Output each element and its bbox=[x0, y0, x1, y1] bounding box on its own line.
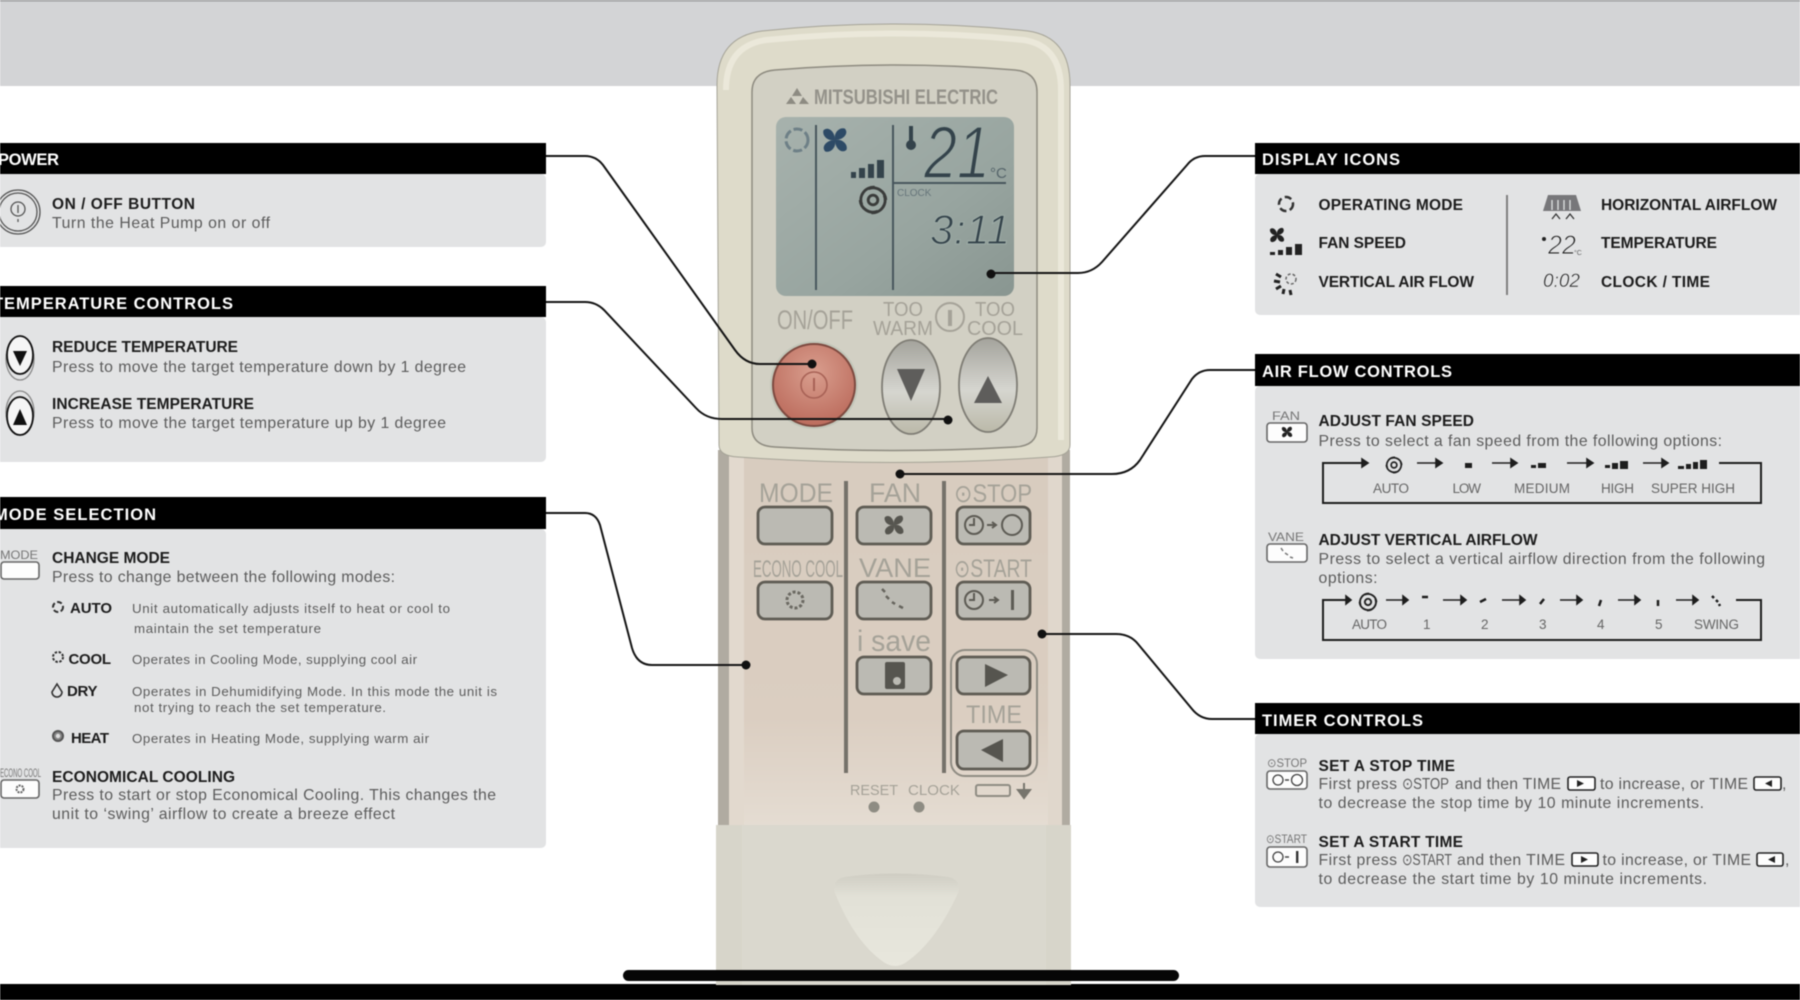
vertical airflow text bbox=[1318, 532, 1765, 587]
STOP key: ⊙STOP bbox=[954, 480, 1032, 508]
icon: mode key: MODE bbox=[0, 548, 38, 562]
stop time description: , bbox=[1782, 776, 1786, 793]
icon: vane key bbox=[1267, 530, 1307, 562]
panel: timer controls bbox=[1255, 703, 1800, 907]
auto mode: maintain the set temperature bbox=[134, 621, 321, 636]
icon: econo cool key bbox=[0, 766, 41, 798]
fan speed cycle diagram bbox=[1323, 457, 1761, 503]
connector: display icons bbox=[986, 156, 1255, 278]
vane labels: 3 bbox=[1539, 617, 1547, 632]
temperature row: 22 bbox=[1547, 230, 1576, 260]
auto mode bbox=[53, 600, 450, 636]
fan speed labels bbox=[1373, 481, 1735, 496]
TIME key group: TIME bbox=[966, 701, 1022, 729]
cover thumb notch bbox=[834, 874, 959, 966]
STOP key bbox=[954, 480, 1032, 544]
LCD temperature: 21 bbox=[923, 111, 990, 194]
vertical airflow text: Press to select a vertical airflow direction from the following bbox=[1318, 551, 1765, 568]
temperature header bbox=[0, 286, 546, 317]
operating mode row: OPERATING MODE bbox=[1318, 197, 1463, 214]
connector: air flow bbox=[896, 370, 1255, 478]
timer header bbox=[1255, 703, 1800, 734]
START key bbox=[954, 555, 1032, 619]
too warm label: WARM bbox=[873, 318, 933, 340]
start time description bbox=[1318, 852, 1789, 888]
stop time description: to decrease the stop time by 10 minute increments. bbox=[1318, 795, 1704, 812]
top grey band bbox=[0, 0, 1800, 86]
LCD mode icon bbox=[786, 129, 808, 151]
clock time row bbox=[1543, 271, 1710, 292]
home indicator bbox=[623, 970, 1179, 981]
bottom black bar bbox=[0, 984, 1800, 1000]
vane labels: 5 bbox=[1655, 617, 1663, 632]
display icons divider bbox=[1506, 195, 1508, 295]
stop time description bbox=[1318, 776, 1786, 812]
fan speed row bbox=[1264, 222, 1406, 255]
LCD time: 3:11 bbox=[930, 206, 1010, 253]
remote shell highlight bbox=[726, 34, 1061, 440]
auto mode: Unit automatically adjusts itself to heat or cool to bbox=[132, 601, 450, 616]
brand logo: MITSUBISHI ELECTRIC bbox=[814, 86, 998, 109]
LCD clock label: CLOCK bbox=[897, 188, 932, 199]
too cool label bbox=[967, 299, 1023, 340]
start time description: and then TIME bbox=[1457, 852, 1565, 869]
LCD swirl icon bbox=[860, 187, 886, 213]
start time description: First press bbox=[1318, 852, 1397, 869]
ON/OFF label: ON/OFF bbox=[777, 305, 853, 335]
air flow header: AIR FLOW CONTROLS bbox=[1262, 363, 1452, 381]
start time title: SET A START TIME bbox=[1318, 834, 1463, 851]
temperature row: TEMPERATURE bbox=[1601, 235, 1717, 252]
info icon bbox=[936, 303, 964, 331]
horizontal airflow row bbox=[1543, 195, 1777, 219]
i save key bbox=[857, 625, 931, 694]
vane labels: AUTO bbox=[1352, 617, 1387, 632]
vertical air flow row bbox=[1274, 274, 1474, 295]
dry mode bbox=[52, 683, 497, 715]
connector: timer bbox=[1038, 630, 1255, 719]
ECONO COOL key bbox=[753, 556, 843, 619]
FAN key: FAN bbox=[869, 478, 921, 508]
too warm label bbox=[873, 299, 933, 340]
economical cooling text bbox=[52, 769, 496, 823]
reset and clock holes bbox=[850, 782, 1030, 812]
stop time description: ⊙STOP bbox=[1402, 776, 1449, 793]
icon: fan key bbox=[1267, 409, 1307, 442]
vertical airflow text: options: bbox=[1318, 570, 1378, 587]
dry mode: not trying to reach the set temperature. bbox=[134, 700, 386, 715]
start time description: , bbox=[1785, 852, 1789, 869]
reset and clock holes: CLOCK bbox=[908, 782, 960, 799]
mode header bbox=[0, 497, 546, 529]
icon: on/off button bbox=[0, 190, 40, 234]
heat mode: Operates in Heating Mode, supplying warm air bbox=[132, 731, 430, 746]
fan speed labels: MEDIUM bbox=[1514, 481, 1570, 496]
connector: mode bbox=[546, 513, 750, 670]
icon: stop key bbox=[1267, 756, 1307, 789]
remote control bbox=[716, 24, 1071, 985]
change mode text bbox=[52, 550, 395, 586]
start time description: ⊙START bbox=[1402, 852, 1452, 869]
FAN key bbox=[857, 478, 931, 544]
auto mode: AUTO bbox=[70, 600, 112, 617]
stop time description: and then TIME bbox=[1455, 776, 1561, 793]
MODE key: MODE bbox=[759, 478, 833, 508]
clock time row: 0:02 bbox=[1543, 271, 1580, 292]
on/off text: Turn the Heat Pump on or off bbox=[52, 215, 271, 232]
timer header: TIMER CONTROLS bbox=[1262, 712, 1423, 730]
ECONO COOL key: ECONO COOL bbox=[753, 556, 843, 583]
too cool label: TOO bbox=[975, 299, 1015, 321]
remote upper shell bbox=[717, 24, 1070, 462]
heat mode bbox=[53, 730, 430, 747]
reset and clock holes: RESET bbox=[850, 782, 898, 799]
fan speed arrows bbox=[1352, 459, 1668, 467]
heat mode: HEAT bbox=[71, 730, 109, 747]
increase temperature text: Press to move the target temperature up by 1 degree bbox=[52, 415, 446, 432]
MODE key bbox=[758, 478, 833, 544]
icon: mode key bbox=[0, 548, 39, 579]
panel: display icons bbox=[1255, 143, 1800, 315]
icon: vane key: VANE bbox=[1268, 530, 1304, 544]
dry mode: Operates in Dehumidifying Mode. In this mode the unit is bbox=[132, 684, 497, 699]
upper control panel bbox=[752, 65, 1037, 450]
fan speed text bbox=[1318, 413, 1722, 450]
vane position icons bbox=[1360, 594, 1720, 610]
temperature row bbox=[1542, 230, 1717, 260]
connector: temperature bbox=[546, 302, 952, 424]
change mode text: CHANGE MODE bbox=[52, 550, 170, 567]
icon: start key bbox=[1266, 832, 1308, 867]
VANE key: VANE bbox=[859, 553, 931, 583]
temperature down button bbox=[882, 340, 940, 434]
on/off text bbox=[52, 196, 271, 232]
TIME key group bbox=[951, 650, 1037, 776]
fan speed labels: SUPER HIGH bbox=[1651, 481, 1735, 496]
clock time row: CLOCK / TIME bbox=[1601, 274, 1710, 291]
air flow header bbox=[1255, 354, 1800, 386]
temperature header: TEMPERATURE CONTROLS bbox=[0, 295, 233, 313]
icon: econo cool key: ECONO COOL bbox=[0, 766, 41, 780]
vane labels: 1 bbox=[1423, 617, 1431, 632]
cool mode bbox=[53, 651, 418, 668]
horizontal airflow row: HORIZONTAL AIRFLOW bbox=[1601, 197, 1777, 214]
icon: fan key: FAN bbox=[1272, 409, 1300, 423]
vane labels: SWING bbox=[1694, 617, 1739, 632]
stop time description: to increase, or TIME bbox=[1600, 776, 1748, 793]
temperature up button bbox=[959, 338, 1017, 432]
power header bbox=[0, 143, 546, 174]
icon: reduce temperature bbox=[6, 336, 34, 380]
temperature row: °C bbox=[1574, 249, 1582, 257]
change mode text: Press to change between the following modes: bbox=[52, 569, 395, 586]
LCD thermometer bbox=[906, 126, 916, 150]
fan speed text: ADJUST FAN SPEED bbox=[1318, 413, 1474, 430]
fan speed labels: AUTO bbox=[1373, 481, 1409, 496]
LCD screen bbox=[776, 111, 1014, 296]
icon: increase temperature bbox=[6, 391, 34, 435]
start time description: to increase, or TIME bbox=[1602, 852, 1751, 869]
fan speed labels: HIGH bbox=[1601, 481, 1634, 496]
panel: temperature controls bbox=[0, 286, 546, 462]
stop time title: SET A STOP TIME bbox=[1318, 758, 1455, 775]
dry mode: DRY bbox=[67, 683, 98, 700]
power button bbox=[770, 341, 858, 429]
vane labels: 2 bbox=[1481, 617, 1489, 632]
reduce temperature text: Press to move the target temperature down by 1 degree bbox=[52, 359, 466, 376]
reduce temperature text bbox=[52, 339, 466, 376]
vertical airflow text: ADJUST VERTICAL AIRFLOW bbox=[1318, 532, 1538, 549]
stop time description: First press bbox=[1318, 776, 1397, 793]
LCD fan icon bbox=[814, 119, 856, 161]
LCD degree unit: °C bbox=[990, 165, 1007, 182]
LCD fan speed bars bbox=[851, 160, 884, 178]
fan speed labels: LOW bbox=[1452, 481, 1481, 496]
too warm label: TOO bbox=[883, 299, 923, 321]
panel: power bbox=[0, 143, 546, 247]
remote lower body bbox=[718, 450, 1070, 830]
VANE key bbox=[857, 553, 931, 619]
economical cooling text: Press to start or stop Economical Cooling. This changes the bbox=[52, 787, 496, 804]
too cool label: COOL bbox=[967, 318, 1023, 340]
increase temperature text bbox=[52, 396, 446, 432]
vane labels: 4 bbox=[1597, 617, 1605, 632]
i save key: i save bbox=[857, 625, 931, 658]
vane arrows bbox=[1340, 596, 1698, 604]
vane labels bbox=[1352, 617, 1739, 632]
cool mode: Operates in Cooling Mode, supplying cool air bbox=[132, 652, 418, 667]
button column dividers bbox=[846, 481, 944, 773]
connector: power bbox=[546, 156, 816, 368]
remote bottom cover bbox=[716, 825, 1071, 985]
panel: air flow controls bbox=[1255, 354, 1800, 659]
cool mode: COOL bbox=[68, 651, 111, 668]
start time description: to decrease the start time by 10 minute increments. bbox=[1318, 871, 1707, 888]
vane cycle diagram bbox=[1323, 594, 1761, 640]
fan speed row: FAN SPEED bbox=[1318, 235, 1406, 252]
economical cooling text: unit to ‘swing’ airflow to create a breeze effect bbox=[52, 806, 396, 823]
display header bbox=[1255, 143, 1800, 174]
vertical air flow row: VERTICAL AIR FLOW bbox=[1318, 274, 1474, 291]
panel: mode selection bbox=[0, 497, 546, 848]
fan speed icons bbox=[1386, 457, 1707, 473]
START key: ⊙START bbox=[954, 555, 1032, 583]
icon: start key: ⊙START bbox=[1266, 832, 1308, 846]
increase temperature text: INCREASE TEMPERATURE bbox=[52, 396, 254, 413]
icon: stop key: ⊙STOP bbox=[1267, 756, 1307, 770]
reduce temperature text: REDUCE TEMPERATURE bbox=[52, 339, 238, 356]
display header: DISPLAY ICONS bbox=[1262, 151, 1400, 169]
on/off text: ON / OFF BUTTON bbox=[52, 196, 195, 213]
fan speed text: Press to select a fan speed from the following options: bbox=[1318, 433, 1722, 450]
economical cooling text: ECONOMICAL COOLING bbox=[52, 769, 235, 786]
